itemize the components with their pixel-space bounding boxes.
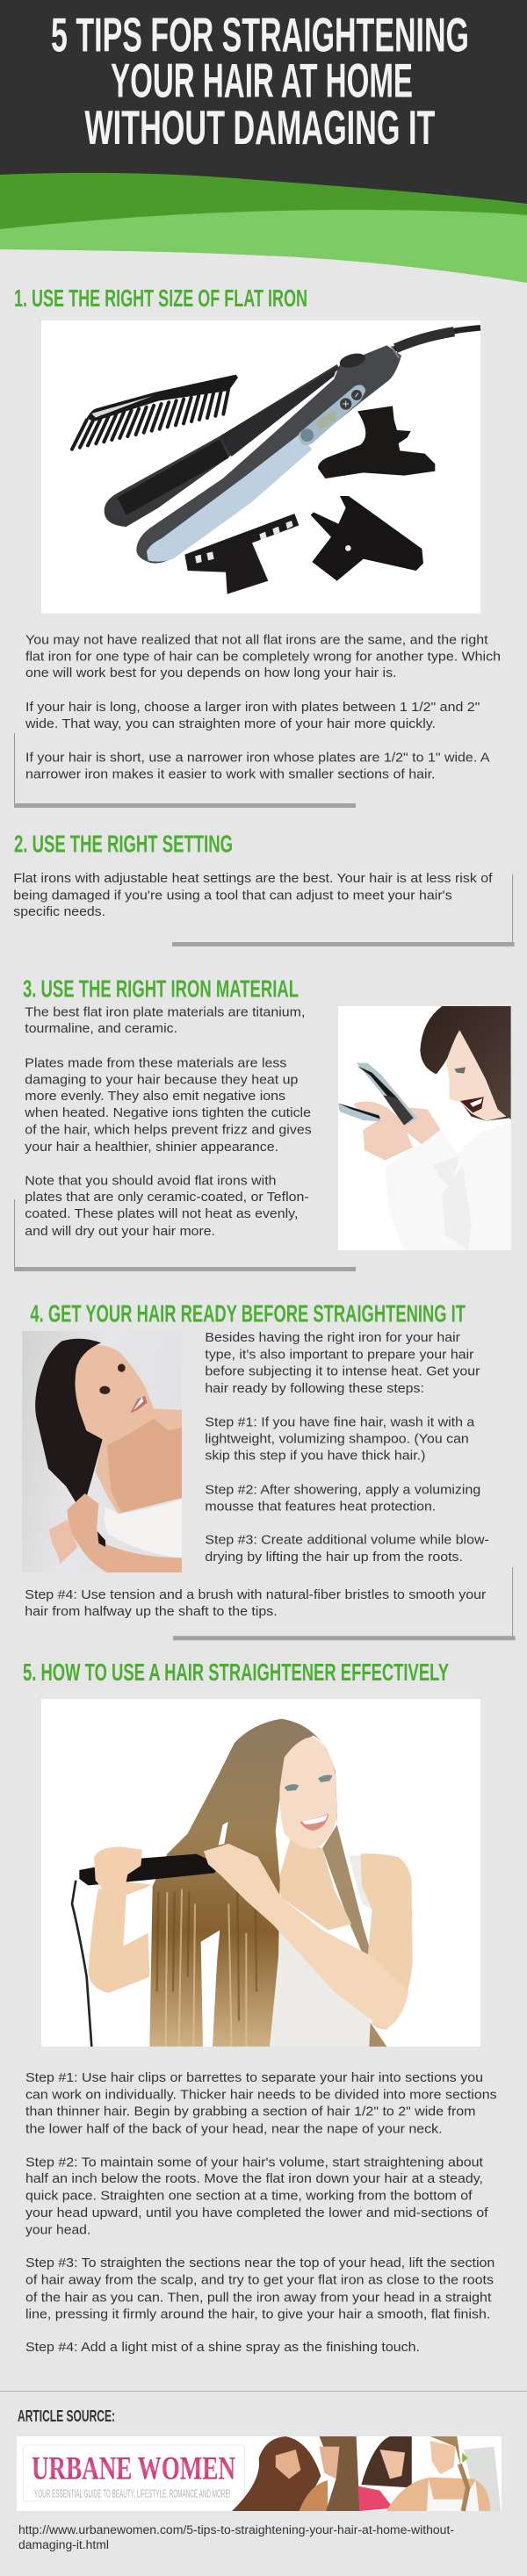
banner name: URBANE WOMEN — [32, 2451, 235, 2486]
hair right side — [322, 1824, 372, 1962]
bracket: section 1 — [14, 733, 356, 808]
other hand — [49, 1520, 77, 1564]
forearm and hand — [206, 1844, 408, 2030]
hair main — [149, 1719, 337, 2047]
text: section 3: and will dry out your hair more. — [25, 1224, 215, 1239]
title — [51, 7, 469, 155]
text: section 2: being damaged if you're using a tool that can adjust to meet your hair's — [13, 888, 452, 903]
cord — [393, 327, 480, 349]
text: section 1: one will work best for you depends on how long your hair is. — [25, 666, 397, 680]
text: section 2: Flat irons with adjustable heat settings are the best. Your hair is at less risk of — [13, 871, 493, 886]
top — [258, 1910, 372, 2047]
smile — [300, 1814, 328, 1831]
text: section 1 — [25, 632, 501, 782]
eyes — [285, 1775, 333, 1791]
hands — [354, 1101, 441, 1161]
text: section 5: of hair away from the scalp, and try to get your flat iron as close to the roots — [25, 2273, 494, 2288]
bracket: section 3 — [14, 1199, 356, 1271]
text: section 5: half an inch below the roots. Move the flat iron down your hair at a steady, — [25, 2171, 483, 2186]
bracket: section 2 — [172, 874, 515, 946]
photo: flat iron, comb and clips — [41, 320, 480, 614]
iron upper arm — [357, 1063, 417, 1126]
text: section 3: coated. These plates will not heat as evenly, — [25, 1206, 298, 1221]
text: section 5: than thinner hair. Begin by grabbing a section of hair 1/2" to 2" wide from — [25, 2104, 476, 2119]
text: section 5: line, pressing it firmly around the hair, to give your hair a smooth, flat finish. — [25, 2306, 490, 2321]
left arm — [88, 1886, 149, 1993]
text: section 3: when heated. Negative ions tighten the cuticle — [24, 1105, 311, 1120]
text: section 4: Step #3: Create additional volume while blow- — [205, 1532, 489, 1547]
text: section 3: of the hair, which helps prevent frizz and gives — [25, 1122, 312, 1137]
text: section 5 — [25, 2070, 497, 2355]
text: section 2: specific needs. — [13, 904, 105, 919]
photo: woman looking at flat iron — [338, 1006, 511, 1250]
skin — [73, 1345, 182, 1514]
clip top right — [318, 406, 435, 479]
woman 4 backdrop: tape measure — [464, 2447, 501, 2511]
text: section 3: tourmaline, and ceramic. — [25, 1021, 177, 1036]
text: section 1: narrower iron makes it easier to work with smaller sections of hair. — [25, 767, 436, 782]
heading: section 3: 3. USE THE RIGHT IRON MATERIAL — [23, 975, 299, 1003]
cord — [72, 1881, 91, 2047]
source url: http://www.urbanewomen.com/5-tips-to-straightening-your-hair-at-home-without- — [18, 2523, 454, 2536]
text: section 5: quick pace. Straighten one section at a time, working from the bottom of — [25, 2188, 473, 2203]
iron — [79, 1854, 221, 1885]
text: section 5: the lower half of the back of your head, near the nape of your neck. — [25, 2121, 443, 2137]
eye and mouth — [454, 1067, 466, 1074]
text: section 3: Note that you should avoid flat irons with — [25, 1173, 277, 1188]
text: section 3 — [24, 1004, 312, 1239]
bracket: section 4 — [173, 1567, 516, 1640]
text: section 5: Step #2: To maintain some of your hair's volume, start straightening about — [25, 2155, 484, 2169]
text: section 1: If your hair is long, choose a larger iron with plates between 1 1/2" and 2" — [25, 700, 480, 715]
hair back — [459, 1089, 509, 1121]
banner women — [232, 2436, 501, 2511]
text: section 4: type, it's also important to prepare your hair — [205, 1347, 474, 1362]
text: section 5: Step #4: Add a light mist of a shine spray as the finishing touch. — [25, 2340, 420, 2355]
hair streaks — [166, 1889, 246, 2047]
text: section 3: damaging to your hair because they heat up — [25, 1072, 298, 1087]
woman 1 — [232, 2436, 321, 2511]
clip bottom left — [184, 514, 299, 594]
hair — [420, 1006, 511, 1119]
text: section 3: more evenly. They also emit negative ions — [25, 1089, 285, 1104]
comb teeth — [72, 390, 228, 450]
text: section 5: your head. — [25, 2222, 90, 2237]
text: section 4: Step #4: Use tension and a brush with natural-fiber bristles to smooth your — [25, 1587, 486, 1602]
heading: section 2: 2. USE THE RIGHT SETTING — [14, 831, 233, 858]
banner tagline: YOUR ESSENTIAL GUIDE TO BEAUTY, LIFESTYLE, ROMANCE AND MORE! — [34, 2488, 230, 2500]
arm and hand — [68, 1493, 182, 1572]
hinge button — [338, 351, 367, 371]
eyes and mouth — [99, 1386, 110, 1394]
text: section 1: You may not have realized that not all flat irons are the same, and the right — [25, 632, 488, 647]
text: section 1: If your hair is short, use a narrower iron whose plates are 1/2" to 1" wide. A — [25, 750, 490, 765]
towel — [104, 1500, 182, 1558]
text: section 4: Step #2: After showering, apply a volumizing — [205, 1482, 480, 1497]
text: section 4 — [25, 1330, 489, 1619]
text: section 5: Step #3: To straighten the sections near the top of your head, lift the section — [25, 2256, 495, 2270]
text: section 3: Plates made from these materials are less — [25, 1055, 286, 1070]
text: section 2 — [13, 871, 493, 919]
text: section 4: skip this step if you have thick hair.) — [205, 1448, 425, 1463]
text: section 4: hair ready by following these steps: — [205, 1381, 424, 1396]
woman 4 — [386, 2478, 490, 2511]
face — [446, 1030, 507, 1121]
clip bottom right — [311, 496, 423, 581]
text: section 1: wide. That way, you can straighten more of your hair more quickly. — [25, 716, 436, 731]
comb spine — [87, 375, 238, 421]
woman 2 — [300, 2480, 328, 2511]
source url: damaging-it.html — [18, 2538, 109, 2551]
text: section 5: your head upward, until you have completed the lower and mid-sections of — [25, 2205, 488, 2220]
lower arm of iron — [136, 345, 401, 564]
text: section 5: Step #1: Use hair clips or barrettes to separate your hair into sections you — [25, 2070, 483, 2085]
left hand — [94, 1846, 153, 1894]
text: section 4: Step #1: If you have fine hair, wash it with a — [205, 1414, 475, 1429]
neck and chest — [278, 1839, 351, 1930]
heading: section 1: 1. USE THE RIGHT SIZE OF FLAT IRON — [14, 284, 307, 312]
header banner — [0, 0, 527, 299]
hair — [35, 1339, 103, 1513]
text: section 4: before subjecting it to intense heat. Get your — [205, 1364, 480, 1379]
text: section 4: Besides having the right iron for your hair — [205, 1330, 460, 1345]
blue plate — [147, 435, 312, 562]
banner logo box — [23, 2445, 244, 2501]
text: section 3: plates that are only ceramic-coated, or Teflon- — [25, 1190, 309, 1205]
text: section 4: mousse that features heat protection. — [205, 1499, 436, 1514]
banner: Urbane Women — [17, 2436, 502, 2511]
text: section 4: lightweight, volumizing shampoo. (You can — [205, 1431, 469, 1446]
hair gaps — [201, 1822, 228, 2047]
photo: woman with wet hair in towel — [22, 1331, 182, 1572]
text: section 3: The best flat iron plate materials are titanium, — [25, 1004, 305, 1020]
source url — [18, 2523, 454, 2551]
shirt — [385, 1122, 511, 1250]
text: section 5: of the hair as you can. Then, pull the iron away from your head in a straight — [25, 2290, 492, 2305]
text: section 4: hair from halfway up the shaft to the tips. — [25, 1604, 278, 1619]
upper arm of iron — [105, 364, 340, 527]
heading: article source: ARTICLE SOURCE: — [18, 2407, 115, 2425]
photo: woman using hair straightener — [41, 1699, 480, 2047]
right upper arm — [360, 1853, 413, 2030]
woman 3 — [361, 2436, 412, 2487]
text: section 3: your hair a healthier, shinier appearance. — [25, 1140, 278, 1155]
face — [279, 1737, 337, 1850]
text: section 5: can work on individually. Thicker hair needs to be divided into more sections — [25, 2088, 497, 2103]
control panel — [299, 385, 365, 445]
text: section 4: drying by lifting the hair up from the roots. — [205, 1550, 463, 1565]
text: section 1: flat iron for one type of hair can be completely wrong for another type. Which — [25, 649, 501, 664]
iron lower arm — [338, 1104, 380, 1121]
